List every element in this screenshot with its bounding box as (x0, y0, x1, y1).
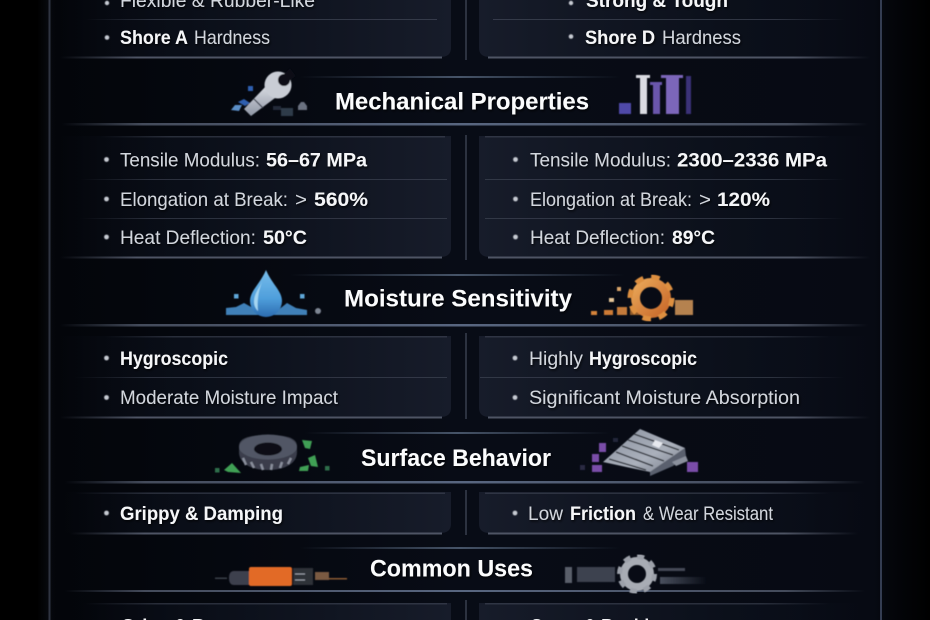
panel: right uses (479, 603, 859, 620)
panel: left uses (80, 603, 451, 620)
section band: moisture sensitivity (60, 274, 868, 326)
right column text: Significant Moisture Absorption (529, 387, 800, 409)
section band: surface behavior (65, 432, 865, 484)
panel: left surface (65, 492, 451, 534)
right column text: Heat Deflection: (530, 227, 665, 249)
right column text: 120% (717, 189, 770, 211)
right column text: & Wear Resistant (643, 503, 773, 525)
left column text: 56–67 MPa (266, 150, 367, 172)
icon: water drop (226, 270, 321, 317)
right column text: Elongation at Break: (530, 189, 692, 211)
icon: orange connector (215, 567, 347, 586)
left column text: Hardness (194, 27, 270, 49)
panel: right moisture (479, 336, 870, 418)
right column text: Highly (529, 348, 583, 370)
section band: mechanical properties (62, 76, 868, 126)
panel: left hardness (60, 0, 451, 58)
right column text: > (699, 189, 711, 211)
left column text: Hygroscopic (120, 348, 228, 370)
section band: common uses (65, 547, 865, 592)
panel: right mechanical (479, 136, 870, 258)
icon: tire (215, 434, 330, 473)
right column text (528, 0, 827, 620)
bullets (104, 1, 573, 515)
centre divider (465, 0, 467, 620)
icon: low friction plate (580, 429, 698, 476)
section titles: Moisture Sensitivity (344, 286, 573, 312)
right column text: 89°C (672, 227, 715, 249)
panel: right surface (479, 492, 865, 534)
left column text: 50°C (263, 227, 307, 249)
right column text: 2300–2336 MPa (677, 150, 827, 172)
right column text: Low (528, 503, 564, 525)
section titles (335, 88, 589, 582)
left column text (120, 0, 368, 620)
icon: wrench (231, 68, 307, 116)
right column text: Tensile Modulus: (530, 150, 671, 172)
left column text: Shore A (120, 27, 188, 49)
icon: orange gear (591, 277, 693, 319)
icon: grey gear (565, 556, 707, 592)
left column text: Heat Deflection: (120, 227, 256, 249)
right column text: Shore D (585, 27, 655, 49)
left column text: Elongation at Break: (120, 189, 288, 211)
left column text: > (295, 189, 307, 211)
left column text: Grippy & Damping (120, 503, 283, 525)
section titles: Mechanical Properties (335, 88, 589, 116)
right column text: Hygroscopic (589, 348, 697, 370)
left column text: Tensile Modulus: (120, 150, 260, 172)
panel: left moisture (60, 336, 451, 418)
right column text: Friction (570, 503, 636, 525)
icon: bar chart (619, 75, 691, 114)
panel: left mechanical (60, 136, 451, 258)
section titles: Surface Behavior (361, 445, 551, 472)
panel: right hardness (479, 0, 870, 58)
section titles: Common Uses (370, 556, 533, 582)
left column text: Moderate Moisture Impact (120, 387, 339, 409)
left column text: 560% (314, 189, 368, 211)
right column text: Hardness (662, 27, 741, 49)
